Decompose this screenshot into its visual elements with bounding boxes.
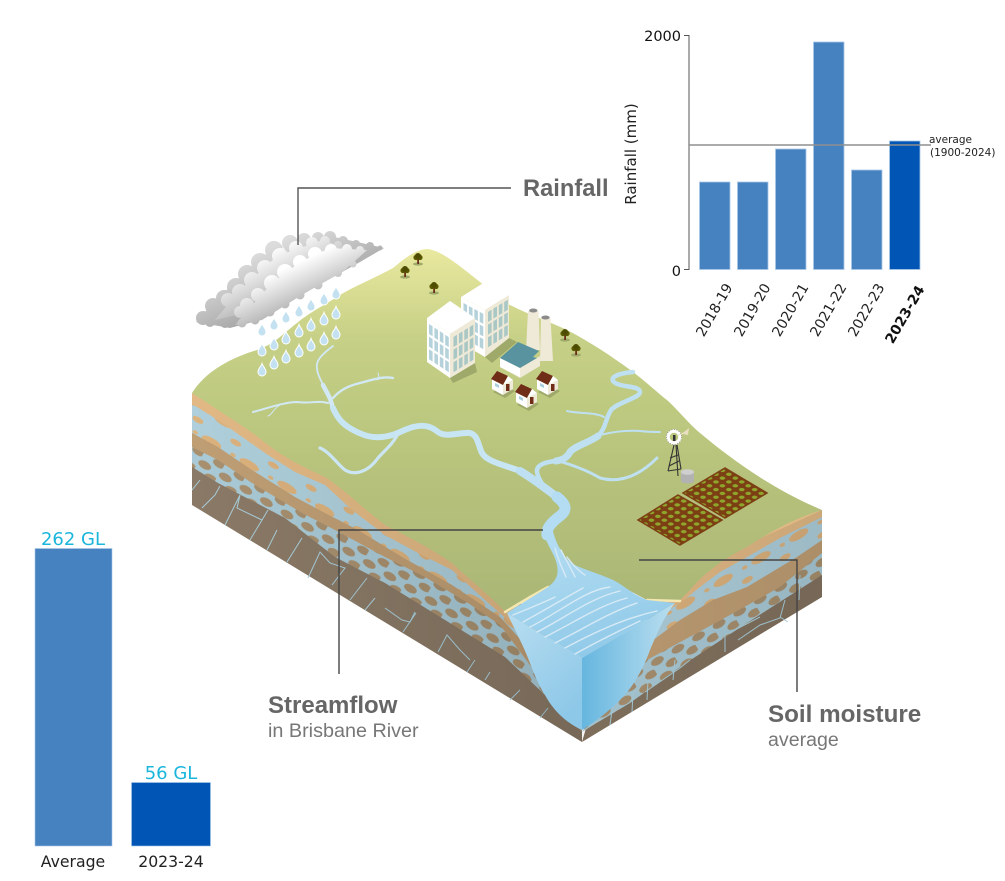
left soil face bbox=[192, 393, 582, 742]
soil moisture leader line bbox=[639, 560, 797, 692]
icon: crop fields bbox=[638, 468, 767, 545]
year labels: 2021-22 bbox=[807, 281, 850, 340]
streamflow values bbox=[41, 529, 197, 784]
river: upper tributaries bbox=[253, 346, 393, 416]
rainfall callout bbox=[298, 176, 609, 245]
sand edge by the river bbox=[505, 587, 680, 612]
water streaks bbox=[513, 548, 657, 654]
rainfall axis tick labels: 0 bbox=[672, 264, 681, 280]
left rock cracks bbox=[192, 480, 548, 718]
landscape block diagram bbox=[192, 231, 822, 742]
right rock cracks bbox=[610, 568, 822, 725]
cloud front layer bbox=[234, 244, 367, 328]
icon: trees bbox=[400, 253, 581, 357]
streamflow values: 56 GL bbox=[145, 763, 197, 784]
land surface bbox=[192, 249, 822, 612]
soil moisture callout bbox=[639, 560, 921, 751]
year labels: 2020-21 bbox=[769, 281, 812, 340]
right soil face bbox=[582, 510, 822, 742]
icon: houses bbox=[491, 371, 560, 411]
river: main left reach bbox=[333, 408, 520, 471]
rainfall heading: Rainfall bbox=[523, 176, 609, 202]
river: lower channel bbox=[547, 497, 565, 535]
icon: windmill and tank bbox=[666, 428, 694, 484]
year labels: 2022-23 bbox=[845, 281, 888, 340]
river: right reach bbox=[598, 372, 640, 436]
rainfall bars bbox=[700, 42, 920, 270]
icon: raindrops bbox=[258, 286, 340, 376]
streamflow values: 262 GL bbox=[41, 529, 105, 550]
average label: average bbox=[929, 134, 972, 146]
soil moisture subheading: average bbox=[768, 729, 839, 751]
streamflow leader line bbox=[339, 530, 543, 674]
icon: rain cloud bbox=[196, 231, 384, 328]
streamflow bars bbox=[35, 548, 210, 846]
streamflow category labels: 2023-24 bbox=[138, 852, 204, 871]
streamflow category labels: Average bbox=[41, 852, 105, 871]
year labels bbox=[693, 281, 929, 347]
year labels: 2019-20 bbox=[731, 281, 774, 340]
streamflow category labels bbox=[41, 852, 204, 871]
streamflow subheading: in Brisbane River bbox=[268, 720, 419, 742]
rainfall axis title: Rainfall (mm) bbox=[622, 103, 640, 205]
average rainfall line bbox=[689, 144, 931, 146]
rainfall axis tick labels bbox=[644, 29, 681, 280]
year labels: 2018-19 bbox=[693, 281, 736, 340]
rivers bbox=[253, 346, 660, 535]
water body bbox=[507, 531, 675, 730]
average label bbox=[929, 134, 995, 159]
cloud back layer bbox=[196, 231, 384, 328]
rainfall axis bbox=[684, 36, 689, 270]
year labels: 2023-24 bbox=[882, 283, 929, 347]
streamflow heading: Streamflow bbox=[268, 692, 398, 719]
rainfall leader line bbox=[298, 188, 511, 245]
icon: office buildings bbox=[427, 282, 517, 383]
rainfall axis tick labels: 2000 bbox=[644, 29, 681, 45]
average label: (1900-2024) bbox=[930, 147, 995, 159]
icon: factory and chimneys bbox=[500, 308, 553, 378]
streamflow bar chart bbox=[35, 529, 210, 871]
rainfall bar chart bbox=[622, 29, 995, 347]
cloud middle layer bbox=[215, 236, 345, 320]
soil moisture heading: Soil moisture bbox=[768, 701, 921, 728]
streamflow callout bbox=[268, 530, 543, 742]
